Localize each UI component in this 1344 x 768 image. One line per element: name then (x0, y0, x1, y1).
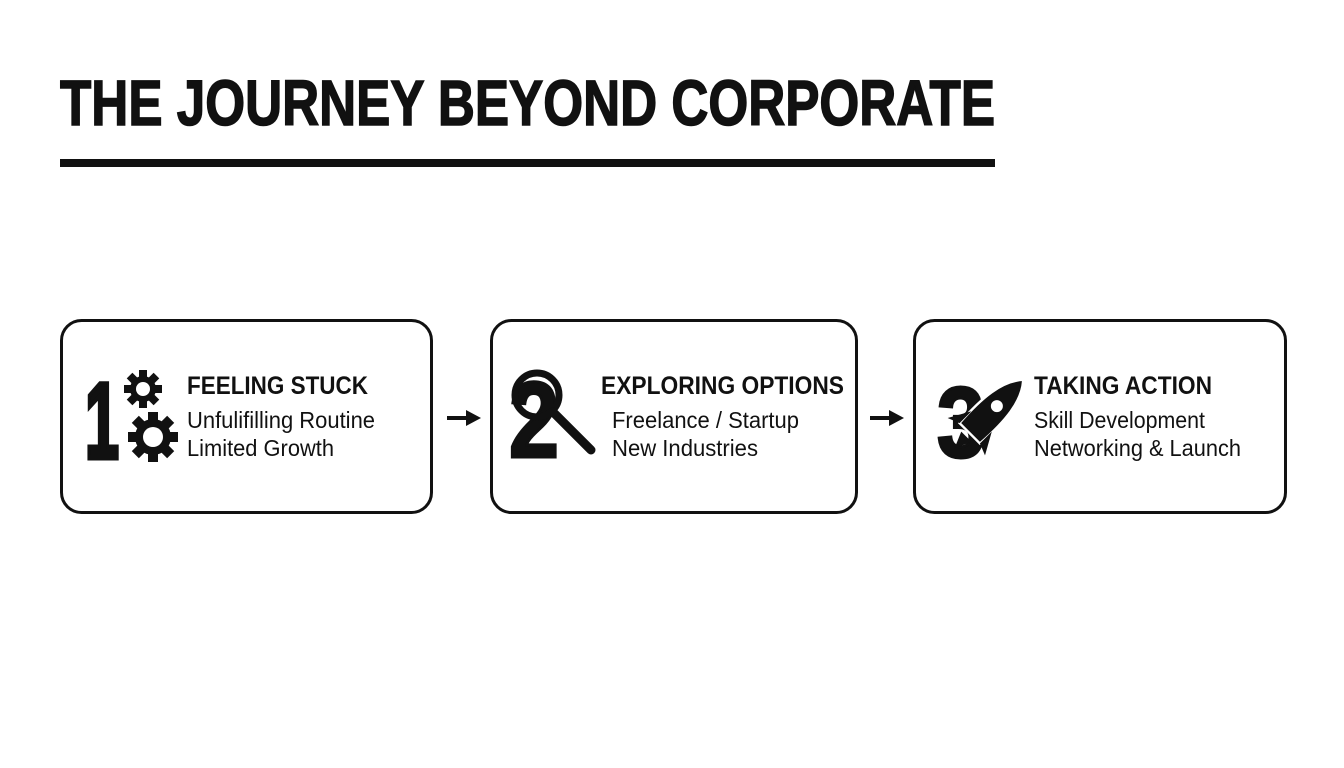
icon: rocket (936, 361, 1042, 467)
heading: TAKING ACTION (1034, 372, 1212, 400)
arrow 2 (870, 410, 904, 426)
number 2: 2 (509, 359, 559, 480)
number 3: 3 (937, 367, 985, 479)
body text: Unfulifilling Routine (187, 407, 375, 433)
panel: taking action (914, 320, 1286, 512)
title underline (60, 159, 995, 167)
icon: gears (124, 370, 178, 462)
panel: exploring options: New Industries (612, 435, 758, 461)
icon: magnifier (515, 373, 591, 450)
panel: exploring options (492, 320, 856, 512)
panel: feeling stuck: Limited Growth (187, 435, 334, 461)
arrow 1 (447, 410, 481, 426)
heading: FEELING STUCK (187, 372, 368, 400)
body text: Skill Development (1034, 407, 1206, 433)
panel: taking action: Networking & Launch (1034, 435, 1241, 461)
number 1: 1 (85, 360, 119, 481)
title: THE JOURNEY BEYOND CORPORATE (60, 67, 995, 139)
panel: feeling stuck (62, 320, 432, 512)
body text: Freelance / Startup (612, 407, 799, 433)
heading: EXPLORING OPTIONS (601, 372, 844, 400)
